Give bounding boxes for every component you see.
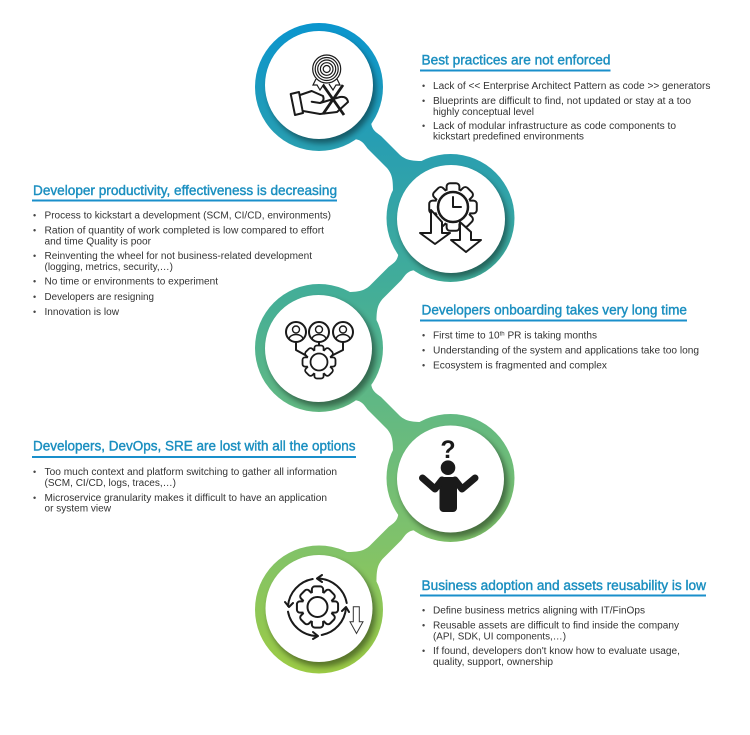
heading: business adoption: Business adoption and assets reusability is low <box>422 578 706 593</box>
panel: developers lost with options: • <box>33 467 36 477</box>
timeline: connected gradient rings <box>255 23 514 674</box>
panel: developer productivity: • <box>33 211 36 221</box>
panel: developer productivity: Innovation is low <box>44 307 120 318</box>
panel: business adoption: Define business metrics aligning with IT/FinOps <box>433 606 645 617</box>
panel: business adoption: (API, SDK, UI components,…) <box>433 632 566 643</box>
panel: developer productivity: and time Quality is poor <box>44 237 152 248</box>
panel: best practices: • <box>422 96 425 106</box>
panel: developer productivity: Reinventing the wheel for not business-related development <box>44 251 312 262</box>
heading: developers lost with options: Developers, DevOps, SRE are lost with all the options <box>33 439 356 454</box>
panel: developer productivity: (logging, metrics, security,…) <box>44 262 173 273</box>
panel: developers onboarding: • <box>422 346 425 356</box>
panel: best practices <box>420 52 710 142</box>
panel: developer productivity: • <box>33 307 36 317</box>
panel: developer productivity: Developers are resigning <box>44 292 154 303</box>
panel: business adoption: Reusable assets are difficult to find inside the company <box>433 621 679 632</box>
panel: developers lost with options: or system view <box>44 504 112 515</box>
panel: business adoption: • <box>422 646 425 656</box>
icon: gear clock with falling arrows <box>420 184 481 252</box>
panel: developers onboarding: Ecosystem is fragmented and complex <box>433 360 607 372</box>
panel: best practices: Lack of modular infrastructure as code components to <box>433 121 676 132</box>
panel: developers onboarding: • <box>422 360 425 370</box>
heading: developer productivity: Developer productivity, effectiveness is decreasing <box>33 183 337 198</box>
panel: developer productivity: Ration of quantity of work completed is low compared to effort <box>44 226 324 237</box>
icon: hand with medal crossed out <box>291 55 348 115</box>
heading: developers onboarding: Developers onboarding takes very long time <box>422 302 687 318</box>
panel: developers onboarding: First time to 10 <box>433 331 499 342</box>
panel: developers onboarding: PR is taking months <box>505 331 597 342</box>
panel: business adoption: If found, developers don't know how to evaluate usage, <box>433 646 680 657</box>
panel: developers lost with options: Microservice granularity makes it difficult to have an application <box>44 493 327 504</box>
panel: developer productivity: • <box>33 292 36 302</box>
panel: best practices: • <box>422 121 425 131</box>
heading: best practices: Best practices are not enforced <box>422 52 610 68</box>
icon: three people connected to a gear <box>286 322 353 378</box>
panel: developer productivity: No time or environments to experiment <box>44 277 218 288</box>
panel: developer productivity <box>32 183 337 318</box>
panel: developers onboarding: th <box>500 332 505 338</box>
panel: business adoption: • <box>422 621 425 631</box>
panel: developers lost with options: Too much context and platform switching to gather all information <box>44 467 337 478</box>
panel: best practices: highly conceptual level <box>433 107 534 118</box>
panel: developers lost with options: (SCM, CI/CD, logs, traces,…) <box>44 478 176 489</box>
panel: developer productivity: • <box>33 251 36 261</box>
panel: best practices: Lack of << Enterprise Architect Pattern as code >> generators <box>433 81 710 92</box>
panel: best practices: • <box>422 81 425 91</box>
panel: best practices: kickstart predefined environments <box>433 132 584 142</box>
panel: business adoption <box>420 578 706 668</box>
panel: developers onboarding <box>420 302 699 372</box>
panel: developers onboarding: • <box>422 331 425 341</box>
panel: developers lost with options: • <box>33 493 36 503</box>
panel: developer productivity: • <box>33 226 36 236</box>
panel: business adoption: quality, support, ownership <box>433 657 553 668</box>
icon: rotating gear cycle with down arrow <box>285 575 363 639</box>
panel: business adoption: • <box>422 606 425 616</box>
panel: best practices: Blueprints are difficult to find, not updated or stay at a too <box>433 96 691 107</box>
panel: developer productivity: Process to kickstart a development (SCM, CI/CD, environments) <box>44 211 331 222</box>
panel: developers onboarding: Understanding of the system and applications take too long <box>433 346 699 357</box>
icon: confused person with question mark: ? <box>440 436 456 464</box>
panel: developers lost with options <box>32 439 356 515</box>
panel: developer productivity: • <box>33 277 36 287</box>
icon: confused person with question mark <box>422 436 475 512</box>
